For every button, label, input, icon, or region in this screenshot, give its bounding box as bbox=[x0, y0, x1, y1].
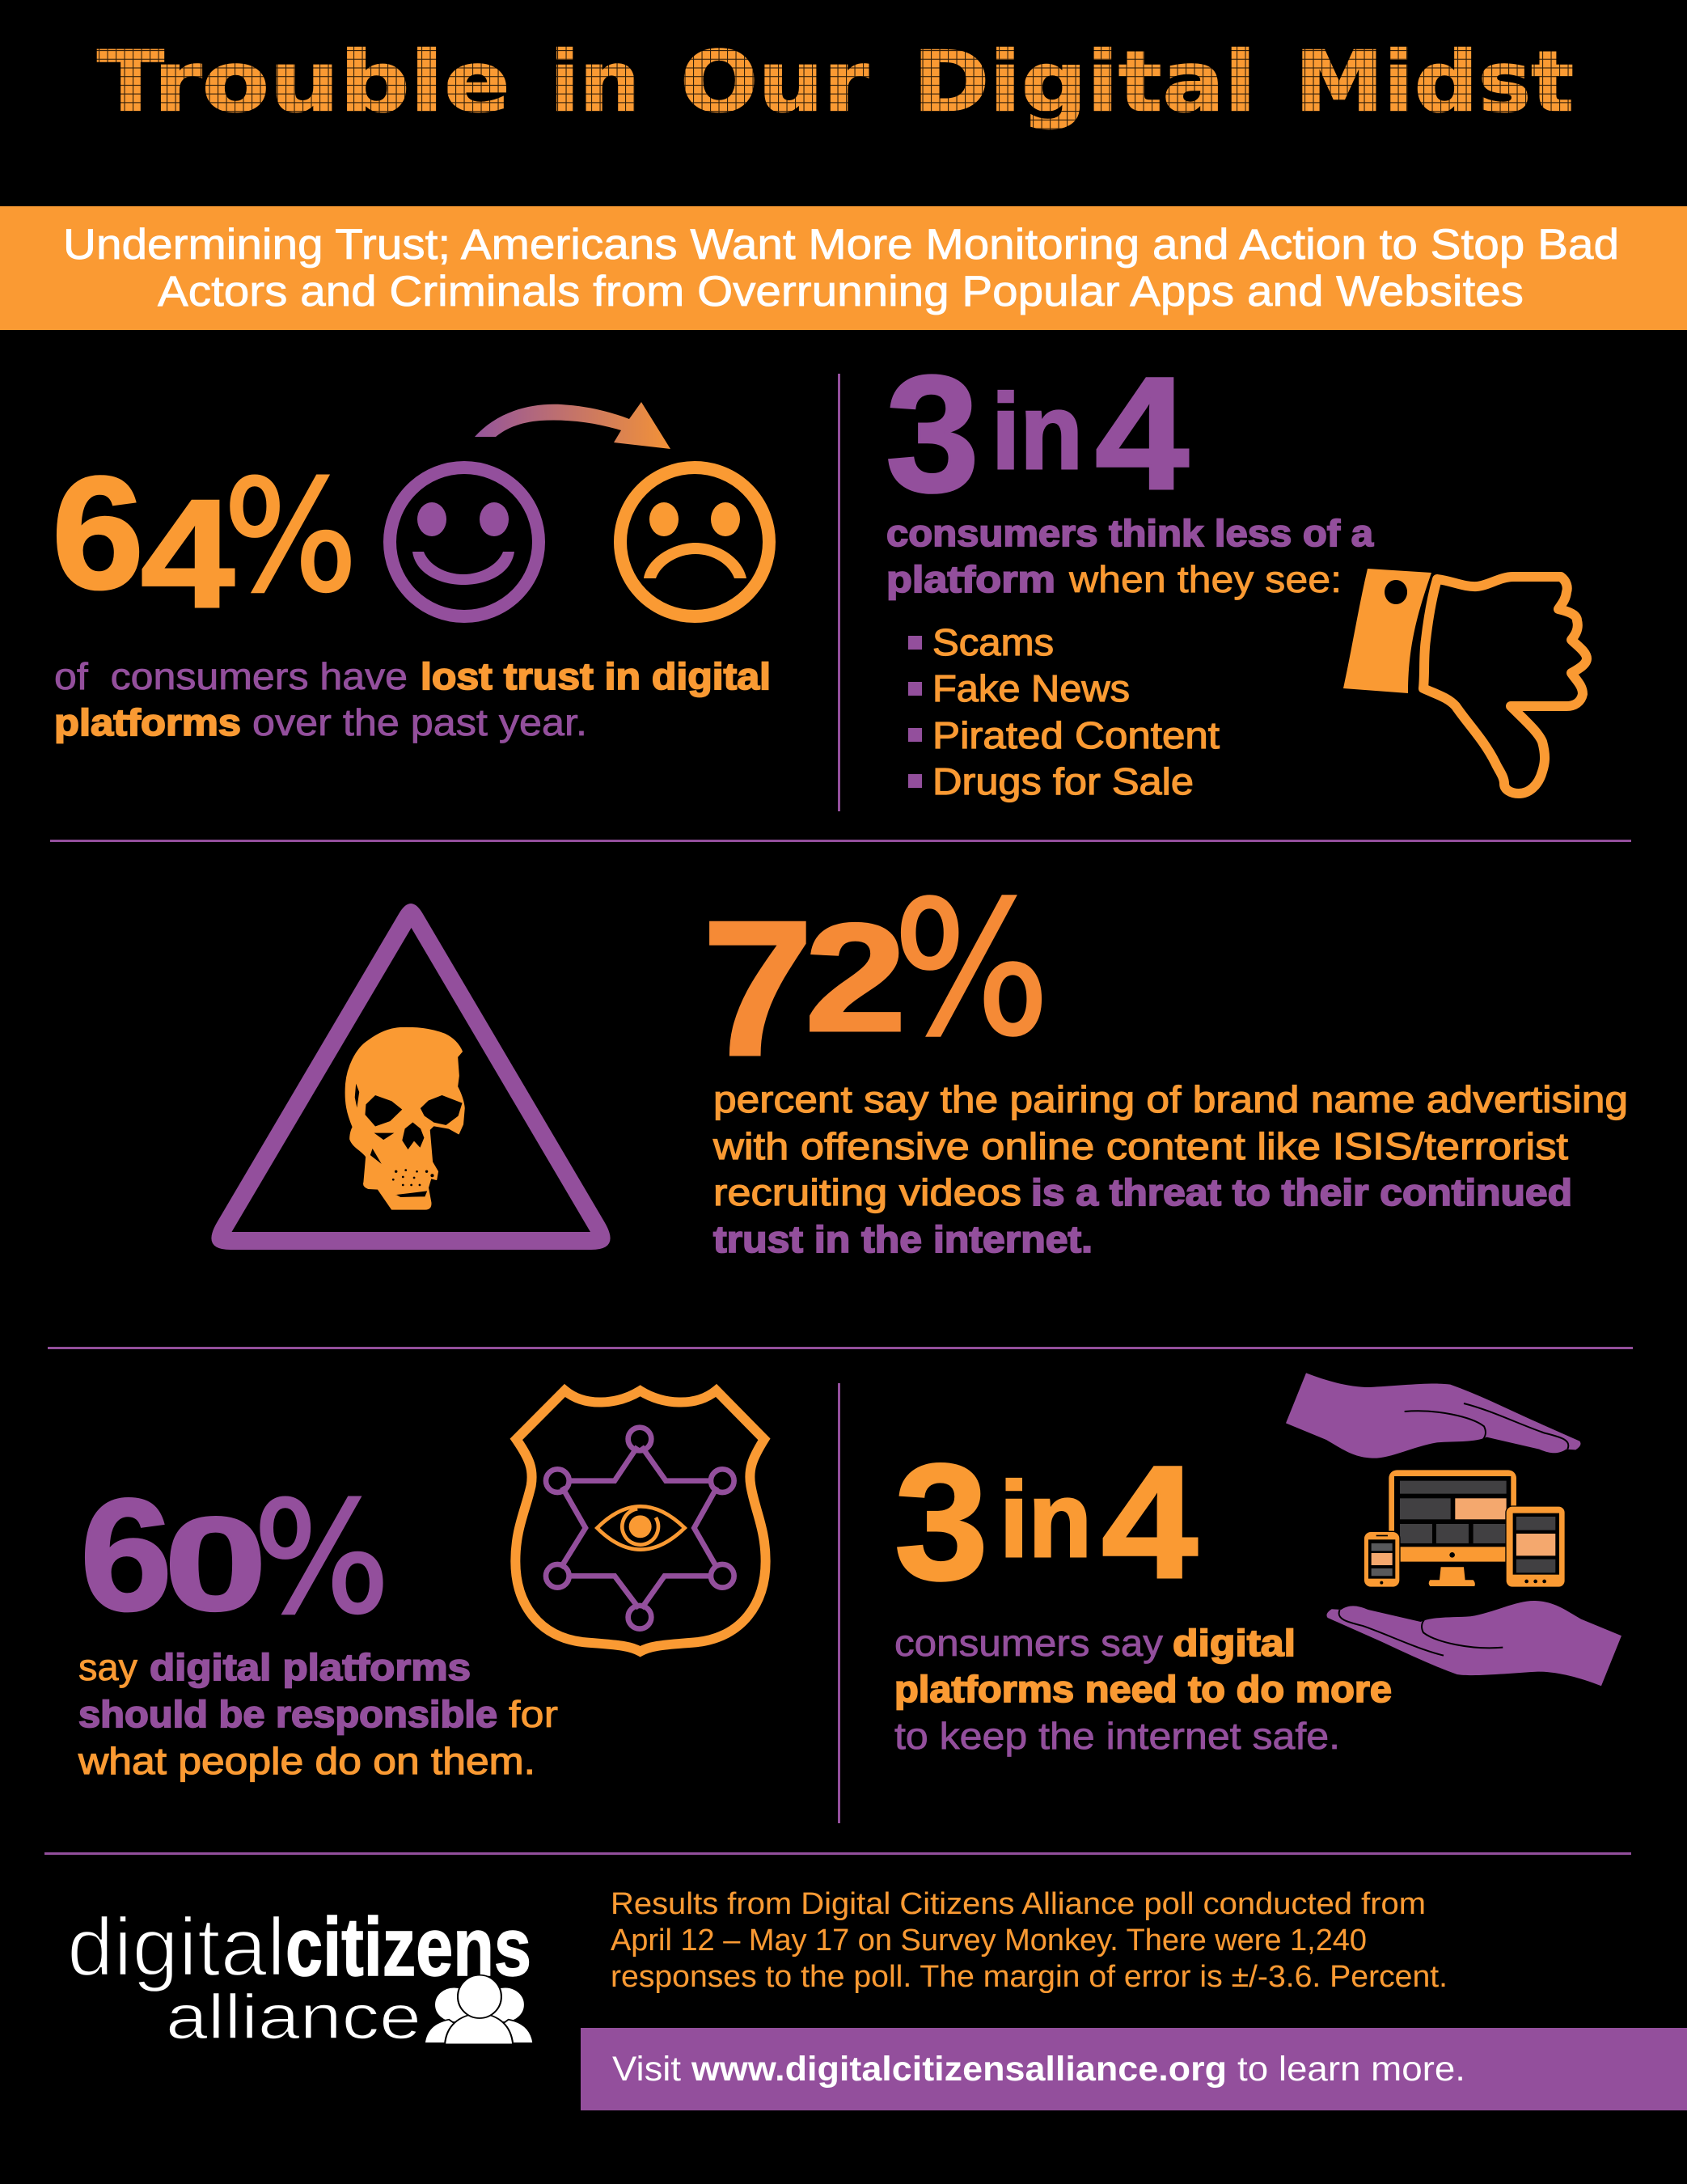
logo: digital citizens alliance: alliance bbox=[166, 1981, 421, 2052]
icon: upper hand bbox=[1286, 1373, 1581, 1458]
call to action banner: to learn more. bbox=[1237, 2050, 1465, 2089]
text: threat description: is a threat to their continued bbox=[1031, 1171, 1572, 1213]
panel: 72 percent threat bbox=[211, 861, 1628, 1260]
panel: 64 percent lost trust bbox=[52, 402, 771, 743]
icon: tablet bbox=[1507, 1507, 1565, 1587]
subtitle banner: Actors and Criminals from Overrunning Popular Apps and Websites bbox=[158, 268, 1524, 315]
statistic: 3 in 4: 4 bbox=[1095, 344, 1189, 523]
text: threat description: percent say the pairing of brand name advertising bbox=[713, 1078, 1628, 1120]
subtitle banner: Undermining Trust; Americans Want More Monitoring and Action to Stop Bad bbox=[63, 221, 1619, 269]
statistic: 3 in 4: 3 bbox=[894, 1430, 988, 1615]
statistic: 3 in 4 bbox=[894, 1430, 1198, 1615]
panel: 3 in 4 think less bbox=[886, 341, 1587, 802]
text: responsibility description: what people do on them. bbox=[78, 1740, 535, 1782]
text: threat description: recruiting videos bbox=[713, 1171, 1021, 1213]
text: do more description: digital bbox=[1173, 1622, 1296, 1664]
logo: digital citizens alliance: digital bbox=[67, 1901, 285, 1993]
title bbox=[89, 34, 1585, 131]
text: lost trust description: lost trust in digital bbox=[421, 655, 771, 697]
title: Digital bbox=[913, 34, 1256, 131]
icon: smiling face bbox=[390, 468, 539, 616]
bullet list: Pirated Content bbox=[932, 714, 1220, 756]
text: poll methodology bbox=[611, 1887, 1448, 1994]
text: lost trust description: over the past year. bbox=[252, 701, 587, 743]
subtitle banner bbox=[0, 206, 1687, 330]
text: responsibility description: for bbox=[509, 1693, 558, 1735]
text: think less of a platform: platform bbox=[886, 558, 1055, 600]
text: do more description: platforms need to do more bbox=[894, 1668, 1392, 1710]
icon: curved arrow bbox=[475, 402, 670, 449]
title: Trouble bbox=[97, 34, 510, 131]
statistic: 3 in 4: in bbox=[991, 372, 1083, 491]
statistic: 60% bbox=[80, 1466, 390, 1648]
call to action banner bbox=[581, 2028, 1687, 2110]
statistic: 64%: 6 bbox=[52, 443, 144, 622]
statistic: 60%: 6 bbox=[80, 1466, 172, 1644]
text: lost trust description bbox=[54, 655, 771, 743]
text: responsibility description: should be responsible bbox=[78, 1693, 497, 1735]
text: think less of a platform: consumers think less of a bbox=[886, 512, 1373, 554]
icon: police badge with eye bbox=[515, 1390, 766, 1652]
statistic: 3 in 4: 3 bbox=[886, 341, 979, 527]
text: poll methodology: April 12 – May 17 on Survey Monkey. There were 1,240 bbox=[611, 1924, 1367, 1958]
text: threat description: trust in the internet. bbox=[713, 1218, 1093, 1260]
statistic: 72%: 7 bbox=[702, 882, 814, 1096]
text: responsibility description: digital platforms bbox=[150, 1646, 471, 1688]
icon: skull bbox=[345, 1028, 464, 1209]
title: Our bbox=[680, 34, 869, 131]
text: do more description bbox=[894, 1622, 1392, 1757]
statistic: 3 in 4 bbox=[886, 341, 1189, 527]
bullet list: Fake News bbox=[932, 667, 1130, 709]
text: threat description bbox=[712, 1078, 1628, 1260]
text: poll methodology: Results from Digital Citizens Alliance poll conducted from bbox=[611, 1887, 1426, 1921]
title: Midst bbox=[1295, 34, 1574, 131]
panel: 3 in 4 need to do more bbox=[894, 1373, 1621, 1757]
text: do more description: to keep the internet safe. bbox=[894, 1715, 1340, 1757]
text: think less of a platform: when they see: bbox=[1068, 558, 1342, 600]
icon: sad face bbox=[620, 468, 769, 616]
text: threat description: with offensive online content like ISIS/terrorist bbox=[712, 1125, 1568, 1167]
bullet list: Scams bbox=[932, 621, 1054, 663]
text: lost trust description: of consumers have bbox=[54, 655, 408, 697]
text: responsibility description bbox=[78, 1646, 558, 1782]
text: think less of a platform bbox=[886, 512, 1373, 600]
text: do more description: consumers say bbox=[894, 1622, 1163, 1664]
icon: phone bbox=[1364, 1532, 1399, 1587]
icon: hands protecting devices bbox=[1286, 1373, 1621, 1686]
panel: 60 percent responsibility bbox=[78, 1390, 766, 1782]
text: lost trust description: platforms bbox=[54, 701, 241, 743]
icon: lower hand bbox=[1326, 1601, 1621, 1686]
title: in bbox=[550, 34, 641, 131]
bullet list bbox=[908, 621, 1220, 802]
statistic: 3 in 4: 4 bbox=[1101, 1433, 1198, 1611]
statistic: 64%: % bbox=[223, 447, 357, 626]
statistic: 64%: 4 bbox=[141, 468, 235, 640]
call to action banner: www.digitalcitizensalliance.org bbox=[691, 2050, 1227, 2089]
icon: group of people bbox=[425, 1975, 533, 2044]
logo: digital citizens alliance bbox=[67, 1901, 533, 2052]
logo: digital citizens alliance: citizens bbox=[285, 1901, 531, 1993]
call to action banner: Visit bbox=[612, 2050, 681, 2089]
text: responsibility description: say bbox=[78, 1646, 137, 1688]
icon: desktop monitor bbox=[1389, 1470, 1516, 1586]
statistic: 72%: % bbox=[893, 861, 1050, 1077]
statistic: 72% bbox=[702, 861, 1050, 1096]
statistic: 60%: % bbox=[253, 1469, 390, 1648]
statistic: 60%: 0 bbox=[164, 1490, 267, 1638]
statistic: 3 in 4: in bbox=[1000, 1460, 1092, 1579]
icon: thumbs down bbox=[1343, 569, 1587, 794]
icon: warning triangle with skull bbox=[211, 904, 611, 1250]
bullet list: Drugs for Sale bbox=[932, 760, 1194, 802]
statistic: 64% bbox=[52, 443, 357, 640]
text: poll methodology: responses to the poll. The margin of error is ±/-3.6. Percent. bbox=[611, 1960, 1448, 1994]
statistic: 72%: 2 bbox=[805, 892, 907, 1064]
